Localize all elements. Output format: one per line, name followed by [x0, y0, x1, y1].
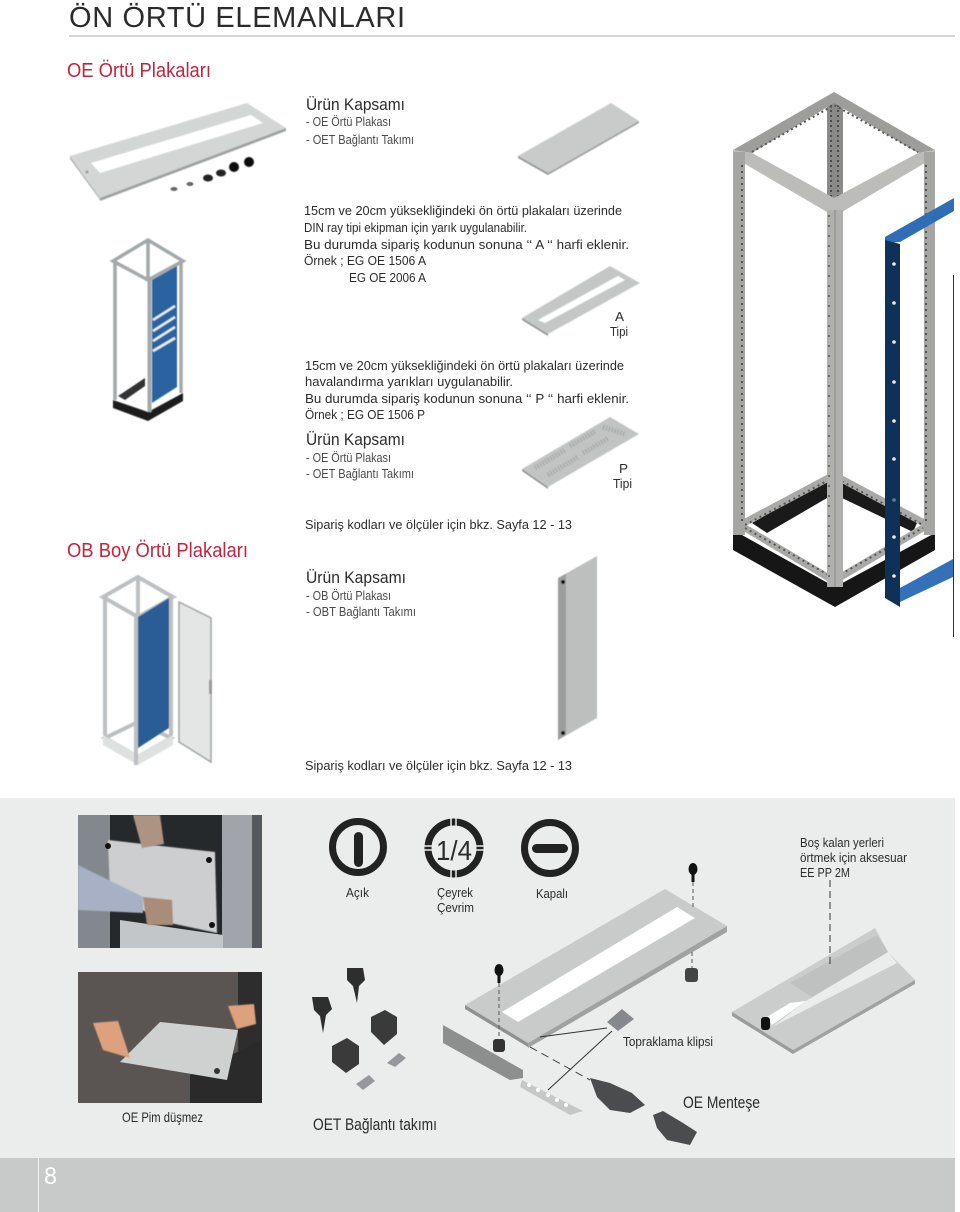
icon: quarter turn [424, 818, 484, 878]
label: OE Menteşe: OE Menteşe [683, 1093, 760, 1112]
text block: Ürün Kapsamı 1: Ürün Kapsamı [306, 95, 405, 114]
image: flat plate [518, 103, 639, 175]
title: ÖN ÖRTÜ ELEMANLARI [69, 2, 405, 34]
text block: Ürün Kapsamı 2: - OE Örtü Plakası [306, 451, 391, 465]
image: OE plate with kit [70, 103, 286, 201]
image: hinge 2 [653, 1111, 697, 1145]
image: large rack with blue panel [733, 92, 954, 637]
footer band [0, 1158, 955, 1212]
text block: A tipi description: 15cm ve 20cm yüksekliğindeki ön örtü plakaları üzerinde [304, 203, 622, 218]
image: P type plate [522, 417, 639, 489]
text block: Ürün Kapsamı 2: Ürün Kapsamı [306, 430, 405, 449]
text block: Ürün Kapsamı 2: - OET Bağlantı Takımı [306, 467, 414, 481]
label: Açık: Açık [346, 885, 369, 900]
label: A Tipi: A [615, 309, 624, 324]
text block: Ürün Kapsamı 1: - OET Bağlantı Takımı [306, 133, 414, 147]
label: P Tipi [613, 461, 632, 491]
image: A type plate [522, 266, 640, 336]
heading: OB Boy Örtü Plakaları: OB Boy Örtü Plakaları [67, 540, 248, 562]
label: P Tipi: P [619, 461, 628, 476]
label: accessory note: EE PP 2M [800, 865, 850, 880]
label: Çeyrek Çevrim [437, 885, 474, 915]
image: rack with OB panel and door [103, 577, 212, 765]
icon: open [332, 822, 384, 872]
text block: Ürün Kapsamı 2 [306, 430, 414, 481]
image: small rack with A type panel [113, 240, 183, 421]
icon: closed [524, 822, 576, 874]
text block: P tipi description [305, 358, 629, 422]
heading: OE Örtü Plakaları: OE Örtü Plakaları [67, 60, 211, 82]
label: A Tipi [610, 309, 628, 339]
arrow: accessory dashed leader [829, 880, 831, 966]
label: accessory note [800, 835, 908, 880]
photo: plate held flat [78, 972, 262, 1103]
panel: grey detail panel [0, 798, 955, 1158]
text block: Ürün Kapsamı 3: - OB Örtü Plakası [306, 589, 391, 603]
image: plate with blanking accessory [732, 928, 915, 1054]
label: OET Bağlantı takımı: OET Bağlantı takımı [313, 1115, 437, 1134]
text block: Ürün Kapsamı 1 [306, 95, 414, 147]
label: accessory note: örtmek için aksesuar [800, 850, 908, 865]
label: Çeyrek Çevrim: Çevrim [437, 900, 474, 915]
image: grounding clip [540, 1009, 634, 1090]
image: hinge 1 [590, 1078, 645, 1113]
text block: Ürün Kapsamı 3: - OBT Bağlantı Takımı [306, 605, 416, 619]
text block: Ürün Kapsamı 1: - OE Örtü Plakası [306, 115, 391, 129]
text block: A tipi description: EG OE 2006 A [349, 270, 426, 285]
image: OET connection kit parts [312, 968, 406, 1090]
photo: mounting plate with two hands [78, 815, 262, 948]
text block: P tipi description: Örnek ; EG OE 1506 P [305, 407, 425, 422]
icon: quarter turn: 1/4 [436, 835, 472, 866]
note: order codes 1: Sipariş kodları ve ölçüler için bkz. Sayfa 12 - 13 [305, 517, 572, 532]
image: OB plate [558, 556, 597, 740]
text block: Ürün Kapsamı 3: Ürün Kapsamı [306, 568, 406, 587]
image: rail with perforated strip [443, 1025, 583, 1115]
text block: P tipi description: havalandırma yarıkları uygulanabilir. [305, 374, 513, 389]
note: order codes 2: Sipariş kodları ve ölçüler için bkz. Sayfa 12 - 13 [305, 758, 572, 773]
page number: 8 [44, 1163, 57, 1190]
label: Kapalı: Kapalı [536, 886, 568, 901]
text block: A tipi description: Örnek ; EG OE 1506 A [304, 253, 426, 268]
text block: Ürün Kapsamı 3 [306, 568, 416, 619]
label: A Tipi: Tipi [610, 324, 628, 339]
label: Topraklama klipsi: Topraklama klipsi [623, 1034, 713, 1049]
text block: A tipi description: Bu durumda sipariş kodunun sonuna ‘‘ A ‘‘ harfi eklenir. [304, 237, 629, 252]
image: exploded OE plate assembly [465, 863, 727, 1080]
text block: P tipi description: 15cm ve 20cm yüksekliğindeki ön örtü plakaları üzerinde [305, 358, 624, 373]
text block: P tipi description: Bu durumda sipariş kodunun sonuna ‘‘ P ‘‘ harfi eklenir. [305, 391, 629, 406]
label: OE Pim düşmez: OE Pim düşmez [122, 1109, 203, 1125]
text block: A tipi description [304, 203, 629, 285]
label: P Tipi: Tipi [613, 476, 632, 491]
text block: A tipi description: DIN ray tipi ekipman için yarık uygulanabilir. [304, 220, 527, 235]
label: accessory note: Boş kalan yerleri [800, 835, 884, 850]
label: Çeyrek Çevrim: Çeyrek [437, 885, 473, 900]
